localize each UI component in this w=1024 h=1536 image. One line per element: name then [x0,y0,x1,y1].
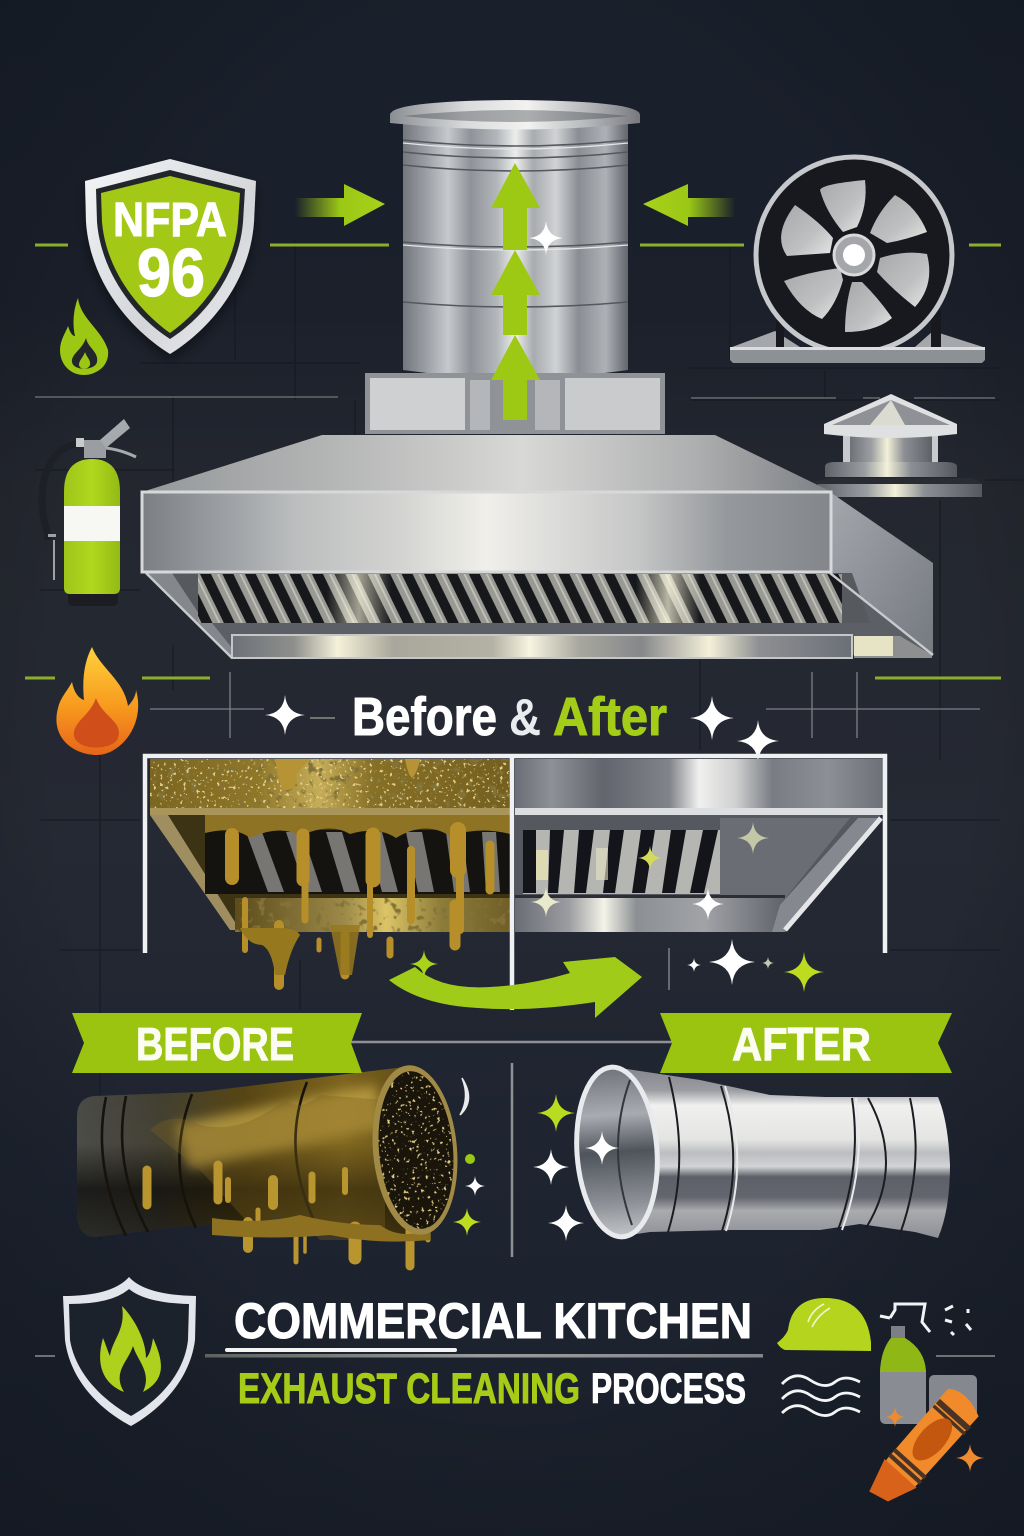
title: COMMERCIAL KITCHEN: COMMERCIAL KITCHEN [234,1293,752,1349]
duct gold highlight band [175,1085,385,1168]
center divider lines [351,1042,672,1257]
icon: spray bottle [880,1304,977,1427]
heading sparkles [265,695,779,762]
comparison frame [145,756,885,1010]
arrow pointing left to stack [643,184,735,226]
grease overlay [205,815,510,838]
subtitle: PROCESS [591,1365,746,1413]
heading: Before & After: & [509,689,541,747]
hood underside [146,573,933,655]
stack top rim [390,100,640,130]
heading: Before & After: After [553,687,667,747]
grease on duct [150,1095,385,1240]
roof vent [810,394,982,497]
ribbon: AFTER: AFTER [732,1018,871,1070]
exhaust stack [365,100,665,434]
heading: Before & After: Before [352,687,497,747]
icon: hard hat [777,1298,871,1351]
sparkle on stack [529,221,563,255]
stack collar [365,373,665,434]
comparison panel: dirty hood [150,759,510,985]
curved green transition arrow [389,957,642,1018]
arrow pointing right to stack [295,184,385,226]
extinguisher valve [84,440,106,458]
dirty lower strip [235,898,510,932]
ribbon: BEFORE [72,1013,362,1073]
heading: Before & After [352,687,667,747]
clean upper panel [515,759,883,808]
fan base [732,331,983,347]
extinguisher cylinder [64,459,120,594]
clean lower strip [515,898,785,932]
duct body [77,1067,410,1237]
stack body [403,118,628,378]
hood top slope [142,435,832,492]
duct drips [147,1165,428,1266]
fan unit [730,157,985,363]
title rule [205,1348,763,1358]
sparkles beside dirty duct [453,1078,485,1236]
duct body [617,1068,950,1238]
icon: orange crayon [862,1384,984,1513]
dirty duct [77,1062,464,1266]
ribbon: AFTER [660,1013,952,1073]
shield text 96: 96 [137,235,205,311]
green airflow arrows up the stack [491,163,540,420]
grease drips [232,830,490,985]
clean underside [515,815,881,900]
decorative green and grey guide lines [25,245,1001,738]
dirty upper panel [150,759,510,808]
icon: air waves [782,1376,860,1416]
clean duct [571,1064,950,1240]
hood front panel [142,492,831,572]
sparkles beside clean duct [533,1094,619,1241]
main hood [142,435,933,658]
fire extinguisher [42,419,136,606]
fan hub [834,235,874,275]
sparkles under comparison [410,939,824,992]
hood louvers [198,574,842,623]
fan blades [781,180,929,332]
dirty underside [150,815,510,932]
icon: small green flame [60,298,108,375]
icon: orange sparkle [956,1444,984,1472]
shield text NFPA: NFPA [113,194,227,247]
ribbon: BEFORE: BEFORE [136,1018,294,1070]
clean ledge [515,808,883,815]
comparison panel: clean hood [515,759,883,932]
icon: orange flame [56,647,138,755]
duct opening [366,1062,464,1238]
subtitle: EXHAUST CLEANING [238,1365,580,1413]
dirty louvers [205,830,510,894]
clean louvers [523,830,720,894]
duct opening [571,1064,663,1240]
hood lower strip [232,635,852,658]
dirty ledge [150,808,510,815]
clean sparkles [737,822,769,854]
NFPA 96 shield [85,159,256,354]
icon: footer shield with flame [63,1277,196,1426]
hood side panel [830,492,933,655]
fan housing [756,157,952,353]
footer rules [35,1355,995,1357]
clean side bracket [772,818,881,932]
